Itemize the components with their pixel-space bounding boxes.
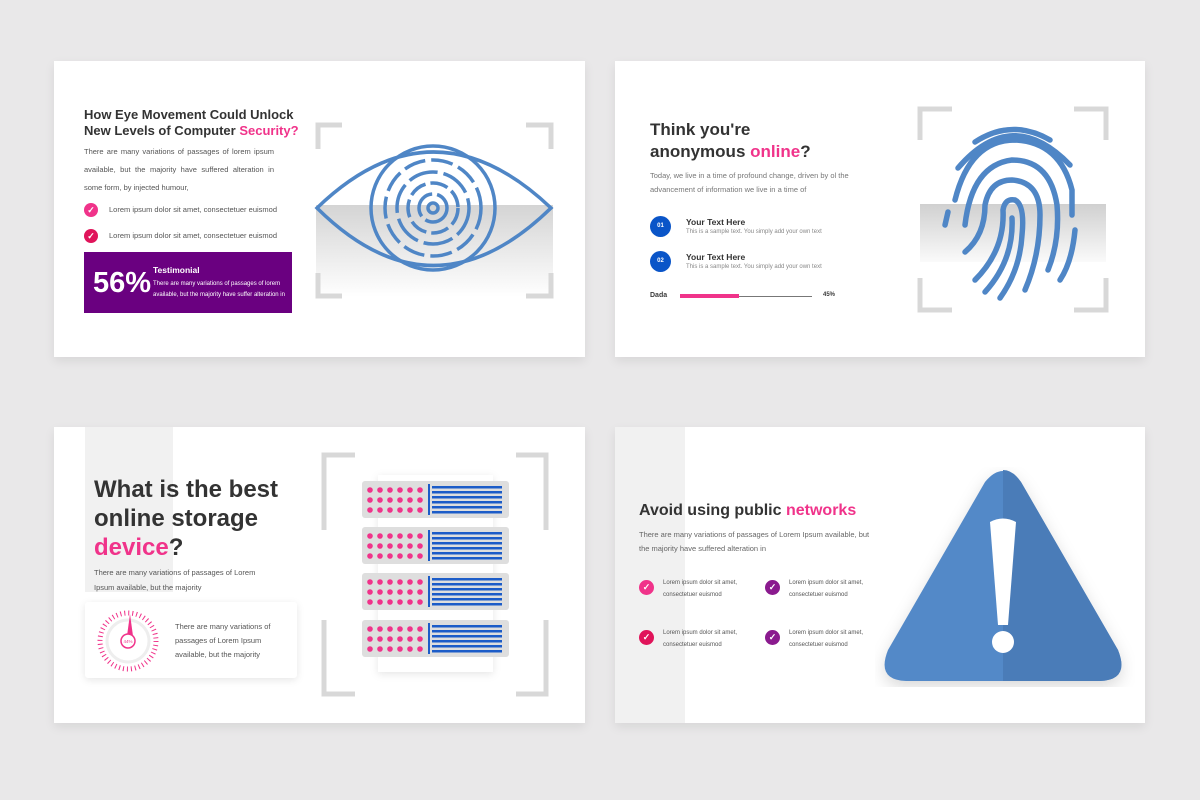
check grid: ✓	[643, 582, 650, 592]
check item 1: Lorem ipsum dolor sit amet, consectetuer euismod	[109, 205, 277, 214]
heading: anonymous online?	[650, 142, 811, 161]
item 02	[650, 251, 822, 272]
check grid: consectetuer euismod	[789, 592, 848, 598]
check item 2	[84, 229, 277, 243]
check item 2: Lorem ipsum dolor sit amet, consectetuer euismod	[109, 231, 277, 240]
heading: Think you're	[650, 120, 750, 139]
item 01: This is a sample text. You simply add your own text	[686, 229, 822, 235]
item 02: This is a sample text. You simply add your own text	[686, 264, 822, 270]
heading: device?	[94, 534, 183, 561]
icon: gauge: 44%	[123, 639, 133, 644]
check grid: consectetuer euismod	[663, 592, 722, 598]
item 01: 01	[657, 223, 664, 229]
heading: How Eye Movement Could Unlock New Levels of Computer Security?	[84, 107, 299, 138]
check grid: Lorem ipsum dolor sit amet,	[663, 630, 737, 636]
check item 1	[84, 203, 277, 217]
check grid: ✓	[769, 632, 776, 642]
check grid	[639, 580, 863, 648]
item 01: Your Text Here	[686, 217, 745, 227]
progress bar: 45%	[823, 292, 835, 298]
icon: eye scan	[314, 122, 554, 298]
icon: fingerprint scan	[918, 106, 1108, 312]
heading: online storage	[94, 505, 258, 532]
testimonial box: There are many variations of passages of lorem available, but the majority have suffer alteration in	[153, 281, 285, 298]
check grid: consectetuer euismod	[789, 642, 848, 648]
testimonial box: 56%	[93, 267, 151, 299]
check grid: ✓	[643, 632, 650, 642]
panel: public networks	[615, 427, 1145, 723]
icon: gauge	[98, 610, 158, 672]
body text: There are many variations of passages of Lorem Ipsum available, but the majority	[94, 568, 255, 592]
body text: Today, we live in a time of profound change, driven by ol the advancement of information we live in a time of	[650, 171, 849, 194]
check grid: Lorem ipsum dolor sit amet,	[789, 580, 863, 586]
testimonial box	[84, 252, 292, 313]
check item 1: ✓	[87, 205, 95, 215]
item 02: Your Text Here	[686, 252, 745, 262]
gauge card: There are many variations of passages of Lorem Ipsum available, but the majority	[175, 622, 270, 659]
heading	[650, 120, 811, 161]
progress bar: Dada	[650, 292, 667, 299]
icon: server rack	[322, 452, 548, 696]
panel: storage device	[54, 427, 585, 723]
item 01	[650, 216, 822, 237]
gauge card	[85, 602, 297, 678]
heading: What is the best	[94, 476, 278, 503]
body text: There are many variations of passages of Lorem Ipsum available, but the majority have suffered alteration in	[639, 530, 869, 553]
check item 2: ✓	[87, 231, 95, 241]
check grid: consectetuer euismod	[663, 642, 722, 648]
icon: warning triangle	[880, 470, 1126, 687]
panel: anonymous online	[615, 61, 1145, 357]
heading: Avoid using public networks	[639, 502, 856, 519]
testimonial box: Testimonial	[153, 265, 200, 275]
body text: There are many variations of passages of lorem ipsum available, but the majority have suffered alteration in some form, by injected humour,	[84, 147, 274, 192]
check grid: ✓	[769, 582, 776, 592]
heading	[94, 476, 278, 561]
check grid: Lorem ipsum dolor sit amet,	[663, 580, 737, 586]
progress bar	[650, 292, 835, 299]
item 02: 02	[657, 258, 664, 264]
panel: eye security	[54, 61, 585, 357]
check grid: Lorem ipsum dolor sit amet,	[789, 630, 863, 636]
